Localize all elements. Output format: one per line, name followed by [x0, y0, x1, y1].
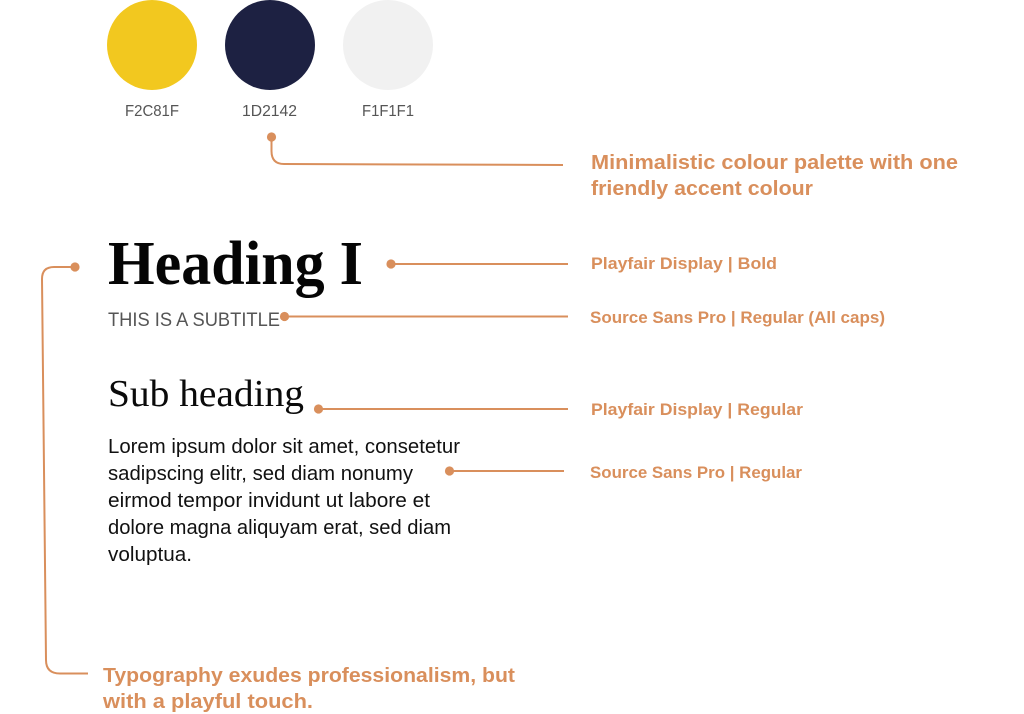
connector: typography [42, 262, 88, 674]
colour swatch: 1D2142: 1D2142 [242, 103, 297, 120]
subtitle sample: THIS IS A SUBTITLE [108, 310, 280, 331]
colour swatch: F1F1F1 [343, 0, 433, 120]
body text sample: sadipscing elitr, sed diam nonumy [108, 463, 413, 485]
connector: subtitle [280, 312, 568, 321]
heading sample: Heading I [108, 230, 363, 298]
connector: palette [267, 132, 563, 165]
colour swatch: F2C81F: F2C81F [125, 103, 179, 120]
label: Playfair Regular: Playfair Display | Regular [591, 400, 803, 419]
label: Source Sans Regular: Source Sans Pro | Regular [590, 463, 802, 482]
body text sample: eirmod tempor invidunt ut labore et [108, 490, 430, 512]
connector: heading [386, 259, 568, 269]
body text sample [108, 436, 460, 566]
body text sample: Lorem ipsum dolor sit amet, consetetur [108, 436, 460, 458]
colour swatch: F2C81F [107, 0, 197, 120]
label: Playfair Bold: Playfair Display | Bold [591, 254, 777, 273]
colour swatch: 1D2142 [225, 0, 315, 120]
callout: colour palette: friendly accent colour [591, 177, 813, 200]
callout: typography: Typography exudes professionalism, but [103, 664, 515, 687]
body text sample: dolore magna aliquyam erat, sed diam [108, 517, 451, 539]
connector: sub heading [314, 404, 568, 414]
colour swatch: F1F1F1: F1F1F1 [362, 103, 414, 120]
sub heading sample: Sub heading [108, 373, 304, 415]
callout: colour palette [591, 151, 958, 200]
callout: colour palette: Minimalistic colour palette with one [591, 151, 958, 174]
callout: typography: with a playful touch. [102, 690, 313, 713]
callout: typography [102, 664, 515, 713]
body text sample: voluptua. [108, 544, 192, 566]
connector: body [445, 466, 564, 476]
label: Source Sans caps: Source Sans Pro | Regular (All caps) [590, 308, 885, 327]
